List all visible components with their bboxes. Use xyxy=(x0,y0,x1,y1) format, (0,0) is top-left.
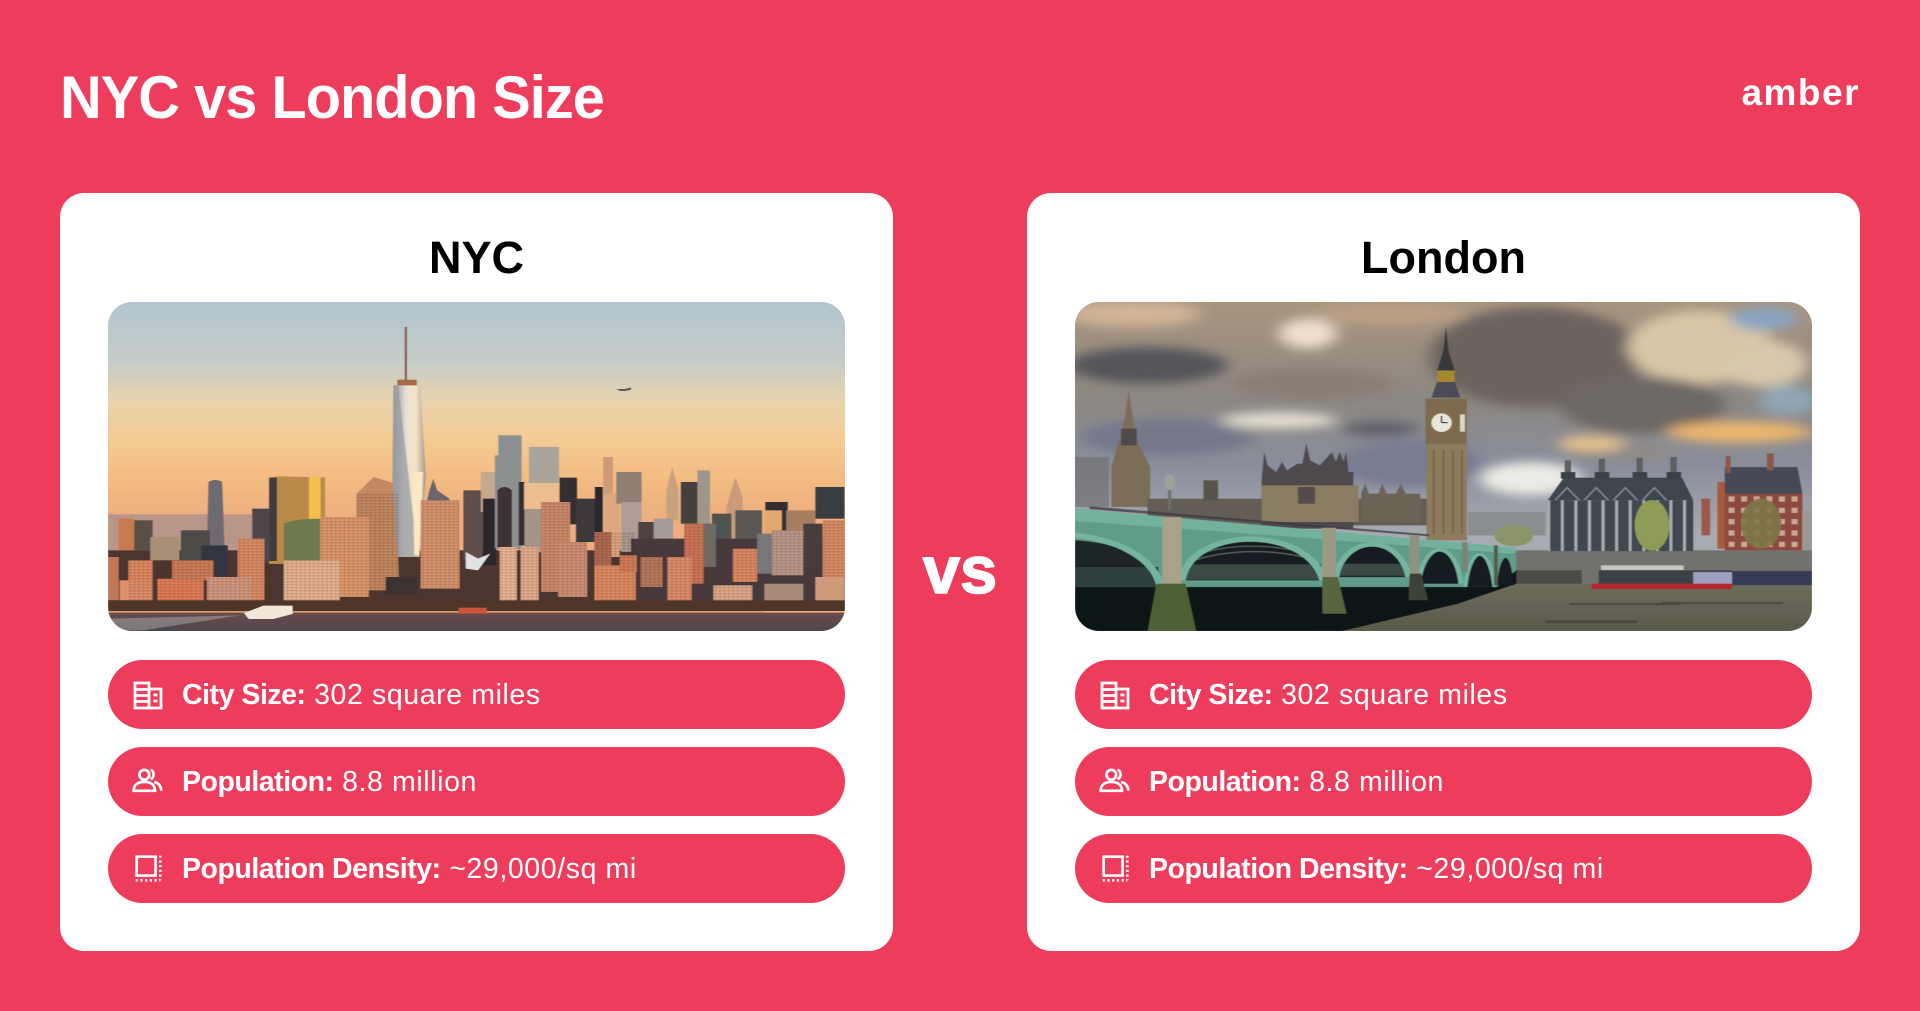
icon: buildings xyxy=(1100,682,1130,710)
white triangular building xyxy=(466,552,490,570)
label text: Population Density: ~29,000/sq mi xyxy=(1149,853,1604,885)
versus label: vs xyxy=(923,533,997,608)
photo: New York skyline at sunset xyxy=(108,302,845,631)
lamp post xyxy=(1168,487,1171,510)
label text: Population: 8.8 million xyxy=(1149,766,1444,798)
stat: city size xyxy=(1075,660,1812,729)
icon: area square xyxy=(135,855,162,882)
bridge deck xyxy=(1075,509,1516,553)
icon: buildings xyxy=(134,682,162,710)
stat: population density xyxy=(108,834,845,903)
distant buildings xyxy=(1468,512,1545,535)
stat: population xyxy=(1075,747,1812,816)
label text: City Size: 302 square miles xyxy=(182,679,541,711)
bridge face xyxy=(1075,520,1516,587)
heading: London: London xyxy=(1361,232,1526,283)
icon: people xyxy=(132,768,162,792)
river xyxy=(1313,584,1812,631)
red brick building xyxy=(1701,454,1812,550)
bridge underside xyxy=(1075,567,1516,631)
front layer xyxy=(108,500,845,607)
scaffold xyxy=(1075,457,1109,507)
WTC xyxy=(405,327,407,382)
Big Ben xyxy=(1426,327,1467,540)
label text: City Size: 302 square miles xyxy=(1149,679,1508,711)
arches xyxy=(1075,535,1514,587)
title: NYC vs London Size xyxy=(60,64,604,131)
icon: area square xyxy=(1102,855,1129,882)
long Parliament range xyxy=(1148,499,1429,525)
stat: city size xyxy=(108,660,845,729)
label text: Population: 8.8 million xyxy=(182,766,477,798)
shoreline and water xyxy=(108,600,845,611)
Victoria tower xyxy=(1111,390,1150,507)
window texture on front buildings xyxy=(128,494,845,607)
label text: Population Density: ~29,000/sq mi xyxy=(182,853,637,885)
crowd on bridge xyxy=(1090,506,1429,536)
panel: NYC xyxy=(60,193,893,951)
photo: Westminster Bridge and Big Ben xyxy=(1075,302,1812,631)
Portcullis House xyxy=(1548,457,1693,551)
tour boat xyxy=(1591,565,1812,589)
icon: people xyxy=(1099,768,1130,792)
stat: population xyxy=(108,747,845,816)
central Parliament towers xyxy=(1262,444,1353,529)
stat: population density xyxy=(1075,834,1812,903)
panel: London xyxy=(1027,193,1860,951)
brand logo: amber xyxy=(1741,72,1860,113)
embankment xyxy=(1514,550,1812,584)
helicopter xyxy=(616,387,631,391)
heading: NYC: NYC xyxy=(429,232,524,283)
back layer xyxy=(207,480,225,545)
piers xyxy=(1148,517,1498,631)
